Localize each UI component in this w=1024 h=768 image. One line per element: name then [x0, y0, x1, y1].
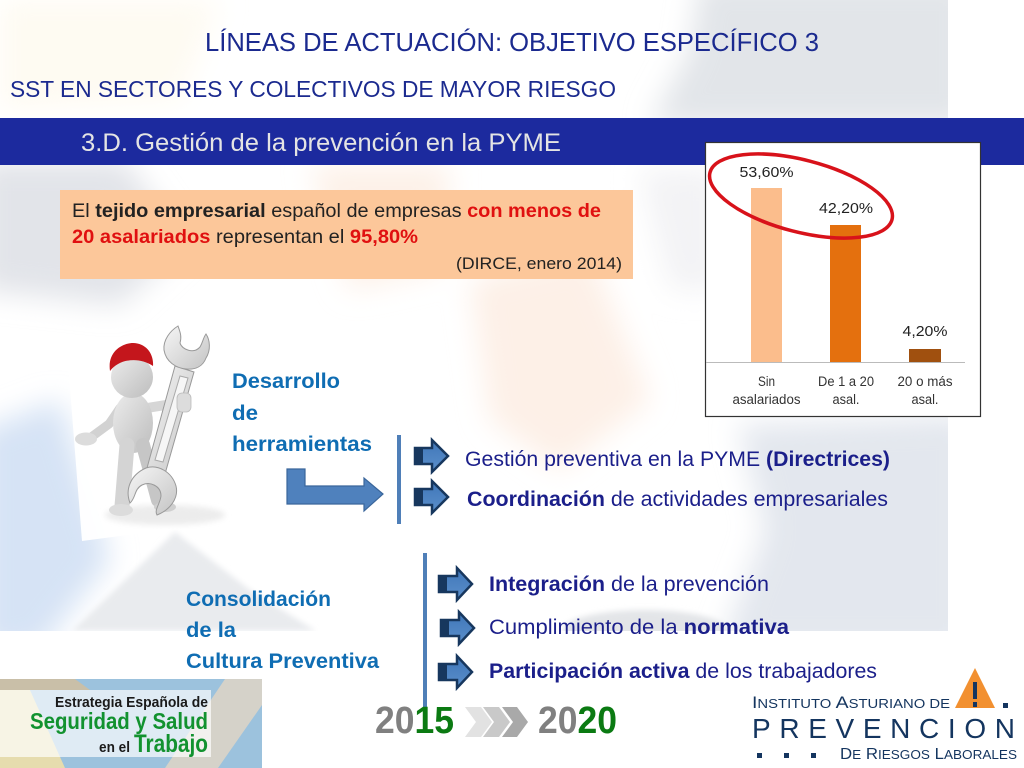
icon: figure holding wrench: [67, 322, 243, 541]
bar chart: [701, 138, 980, 416]
subtitle: SST EN SECTORES Y COLECTIVOS DE MAYOR RIESGO: [10, 76, 616, 102]
section heading: 3.D. Gestión de la prevención en la PYME: [81, 129, 561, 157]
strategy banner: [0, 679, 262, 768]
wrench: [128, 326, 209, 515]
bar: sin asalariados: asalariados: [732, 392, 801, 407]
bar: de 1 a 20 asalariados: 42,20%: [819, 201, 873, 217]
banner text: Seguridad y Salud: [30, 708, 208, 734]
item: cumplimiento: Cumplimiento de la normativa: [489, 616, 789, 639]
bar: sin asalariados: [732, 165, 801, 407]
title: LÍNEAS DE ACTUACIÓN: OBJETIVO ESPECÍFICO 3: [205, 27, 819, 57]
section band: [0, 118, 1024, 165]
logo: Instituto Asturiano de Prevención: PREVENCION: [752, 713, 1015, 744]
banner text: Trabajo: [134, 730, 208, 758]
bar: sin asalariados: Sin: [758, 374, 775, 389]
heading: consolidación de la cultura preventiva: Consolidación: [186, 588, 331, 611]
item: gestión preventiva: Gestión preventiva en la PYME (Directrices): [465, 448, 890, 471]
arrow: integración: [438, 568, 472, 600]
bar: de 1 a 20 asalariados: asal.: [832, 392, 860, 407]
banner text: en el: [99, 740, 130, 756]
heading: consolidación de la cultura preventiva: Cultura Preventiva: [186, 650, 379, 673]
bar: de 1 a 20 asalariados: De 1 a 20: [818, 374, 874, 389]
arrow: cumplimiento: [440, 612, 474, 644]
callout: tejido empresarial: El tejido empresarial español de empresas con menos de: [72, 200, 601, 222]
bar: de 1 a 20 asalariados: [818, 201, 874, 407]
banner text: Estrategia Española de: [55, 695, 208, 711]
bar: 20 o más asalariados: 4,20%: [902, 324, 948, 340]
arrow: gestión preventiva: [414, 440, 448, 472]
callout: tejido empresarial: [60, 190, 633, 279]
logo: Instituto Asturiano de Prevención: [752, 668, 1017, 763]
timeline 2015 to 2020: 2020: [538, 700, 617, 742]
logo: Instituto Asturiano de Prevención: DE RIESGOS LABORALES: [840, 746, 1017, 763]
logo: Instituto Asturiano de Prevención: INSTITUTO ASTURIANO DE: [752, 693, 950, 712]
arrow: coordinación: [414, 481, 448, 513]
bar: 20 o más asalariados: [898, 324, 953, 407]
bar: sin asalariados: 53,60%: [740, 165, 794, 181]
timeline 2015 to 2020: [375, 700, 617, 742]
heading: desarrollo de herramientas: herramientas: [232, 433, 372, 456]
callout: tejido empresarial: (DIRCE, enero 2014): [456, 255, 622, 273]
heading: consolidación de la cultura preventiva: de la: [186, 619, 236, 642]
divider: tools list: [397, 435, 401, 524]
heading: desarrollo de herramientas: [232, 370, 372, 456]
divider: culture list: [423, 553, 427, 708]
heading: desarrollo de herramientas: de: [232, 402, 258, 425]
figure body: [75, 356, 178, 516]
item: integración: Integración de la prevención: [489, 573, 769, 596]
item: participación: Participación activa de los trabajadores: [489, 660, 877, 683]
item: coordinación: Coordinación de actividades empresariales: [467, 488, 888, 511]
heading: desarrollo de herramientas: Desarrollo: [232, 370, 340, 393]
bar: 20 o más asalariados: asal.: [912, 392, 938, 407]
icon: warning triangle: [955, 668, 995, 708]
bar: 20 o más asalariados: 20 o más: [898, 374, 953, 389]
red cap: [110, 343, 153, 371]
banner text: [30, 695, 208, 758]
heading: consolidación de la cultura preventiva: [186, 588, 379, 673]
arrow: elbow to tools list: [287, 469, 383, 511]
chevrons: [465, 707, 528, 737]
highlight ellipse: [701, 138, 901, 254]
arrow: participación: [438, 656, 472, 688]
timeline 2015 to 2020: 2015: [375, 700, 454, 742]
callout: tejido empresarial: 20 asalariados representan el 95,80%: [72, 226, 418, 248]
